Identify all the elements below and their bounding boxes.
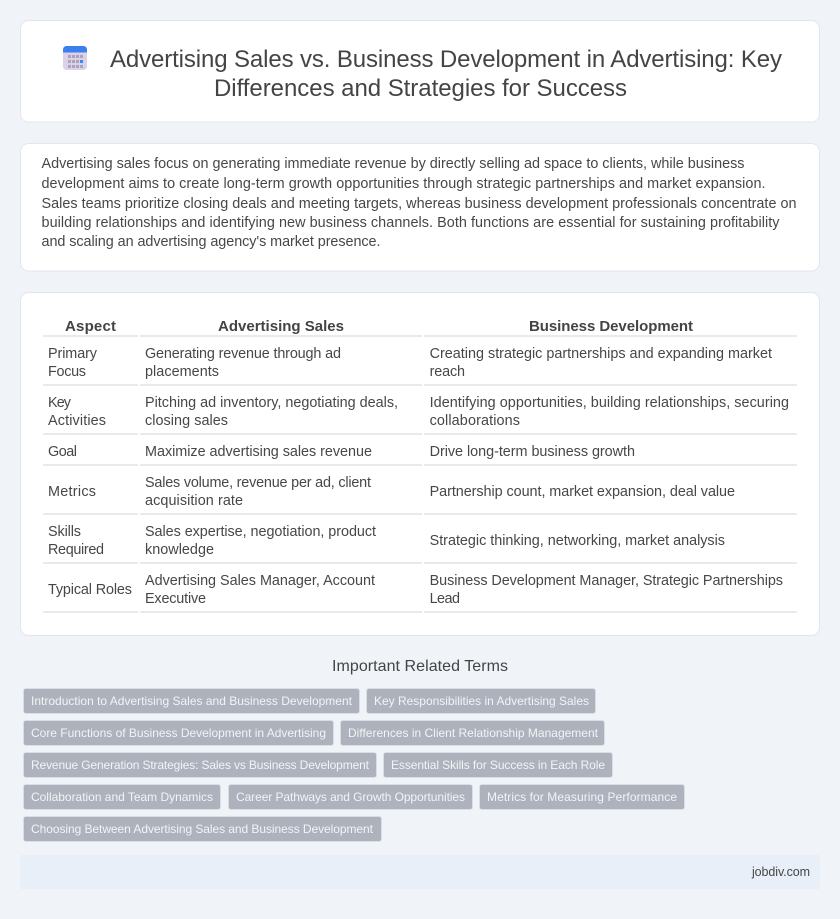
tag [480,784,684,810]
tag: Career Pathways and Growth Opportunities [236,790,465,804]
table row: typical roles: Lead [430,591,460,607]
text block: summary paragraph: building relationships and identifying new business channels. Both functions are essential for sustaining profitability [42,215,780,231]
table row: metrics: Sales volume, revenue per ad, client [145,475,371,491]
title [110,46,782,102]
text block: summary paragraph: Sales teams prioritize closing deals and meeting targets, whereas business development professionals concentrate on [42,196,796,212]
tag [24,688,360,714]
tag [24,816,382,842]
tag: Essential Skills for Success in Each Role [391,758,605,772]
tag: Choosing Between Advertising Sales and Business Development [31,822,374,836]
tag [24,720,334,746]
table row: key activities: closing sales [145,413,228,429]
table row: metrics: acquisition rate [145,493,243,509]
tag [366,688,596,714]
table row: primary focus: Primary [48,346,98,362]
table row: metrics [48,475,735,509]
footer source text: jobdiv.com [751,865,810,879]
table row: typical roles: Typical Roles [48,582,132,598]
tag: Introduction to Advertising Sales and Business Development [31,694,353,708]
tag [24,784,220,810]
panel: comparison table [20,292,820,636]
table row: primary focus: placements [145,364,219,380]
table header row: Advertising Sales [218,318,344,335]
heading: important related terms: Important Related Terms [332,658,508,675]
tag [340,720,604,746]
table row: typical roles: Executive [145,591,206,607]
text block: summary paragraph: and scaling an advertising agency's market presence. [42,234,380,250]
table row: skills required: Required [48,542,104,558]
table row: key activities [48,395,789,429]
icon: calendar [63,46,87,70]
tag [228,784,472,810]
tag [24,752,376,778]
text block: summary paragraph: development aims to create long-term growth opportunities through strategic partnerships and market expansion. [42,176,766,192]
table row: primary focus: Creating strategic partnerships and expanding market [430,346,772,362]
tag [384,752,612,778]
tag: Key Responsibilities in Advertising Sales [374,694,589,708]
title: Differences and Strategies for Success [214,75,627,102]
tag: Metrics for Measuring Performance [487,790,677,804]
tag: Differences in Client Relationship Management [348,726,599,740]
table row: skills required [48,524,725,558]
table row: skills required: Skills [48,524,81,540]
text block: summary paragraph [42,156,796,250]
table row: key activities: Key [48,395,72,411]
table row: key activities: Identifying opportunities, building relationships, securing [430,395,789,411]
table row: key activities: Pitching ad inventory, negotiating deals, [145,395,398,411]
table row: key activities: collaborations [430,413,520,429]
table row: metrics: Metrics [48,484,96,500]
table row: skills required: knowledge [145,542,214,558]
table row: primary focus: Focus [48,364,86,380]
table row: skills required: Sales expertise, negotiation, product [145,524,376,540]
text block: summary paragraph: Advertising sales focus on generating immediate revenue by directly selling ad space to clients, while business [42,156,744,172]
table row: goal [48,444,635,460]
panel: related term tags [24,688,684,842]
tag: Revenue Generation Strategies: Sales vs Business Development [31,758,370,772]
panel: header [20,20,820,122]
table row: primary focus [48,346,772,380]
table header row: Aspect [65,318,116,335]
table header row [65,318,693,335]
table row: typical roles: Advertising Sales Manager, Account [145,573,375,589]
tag: Core Functions of Business Development in Advertising [31,726,326,740]
panel: summary [20,144,820,271]
table row: primary focus: Generating revenue through ad [145,346,341,362]
table row: goal: Maximize advertising sales revenue [145,444,372,460]
table header row: Business Development [529,318,693,335]
table row: skills required: Strategic thinking, networking, market analysis [430,533,725,549]
table row: typical roles [48,573,783,607]
table row: metrics: Partnership count, market expansion, deal value [430,484,735,500]
table row: key activities: Activities [48,413,106,429]
table row: typical roles: Business Development Manager, Strategic Partnerships [430,573,783,589]
table row: goal: Goal [48,444,77,460]
footer [20,855,820,889]
title: Advertising Sales vs. Business Development in Advertising: Key [110,46,782,73]
tag: Collaboration and Team Dynamics [31,790,213,804]
table row: primary focus: reach [430,364,465,380]
table row: goal: Drive long-term business growth [430,444,635,460]
